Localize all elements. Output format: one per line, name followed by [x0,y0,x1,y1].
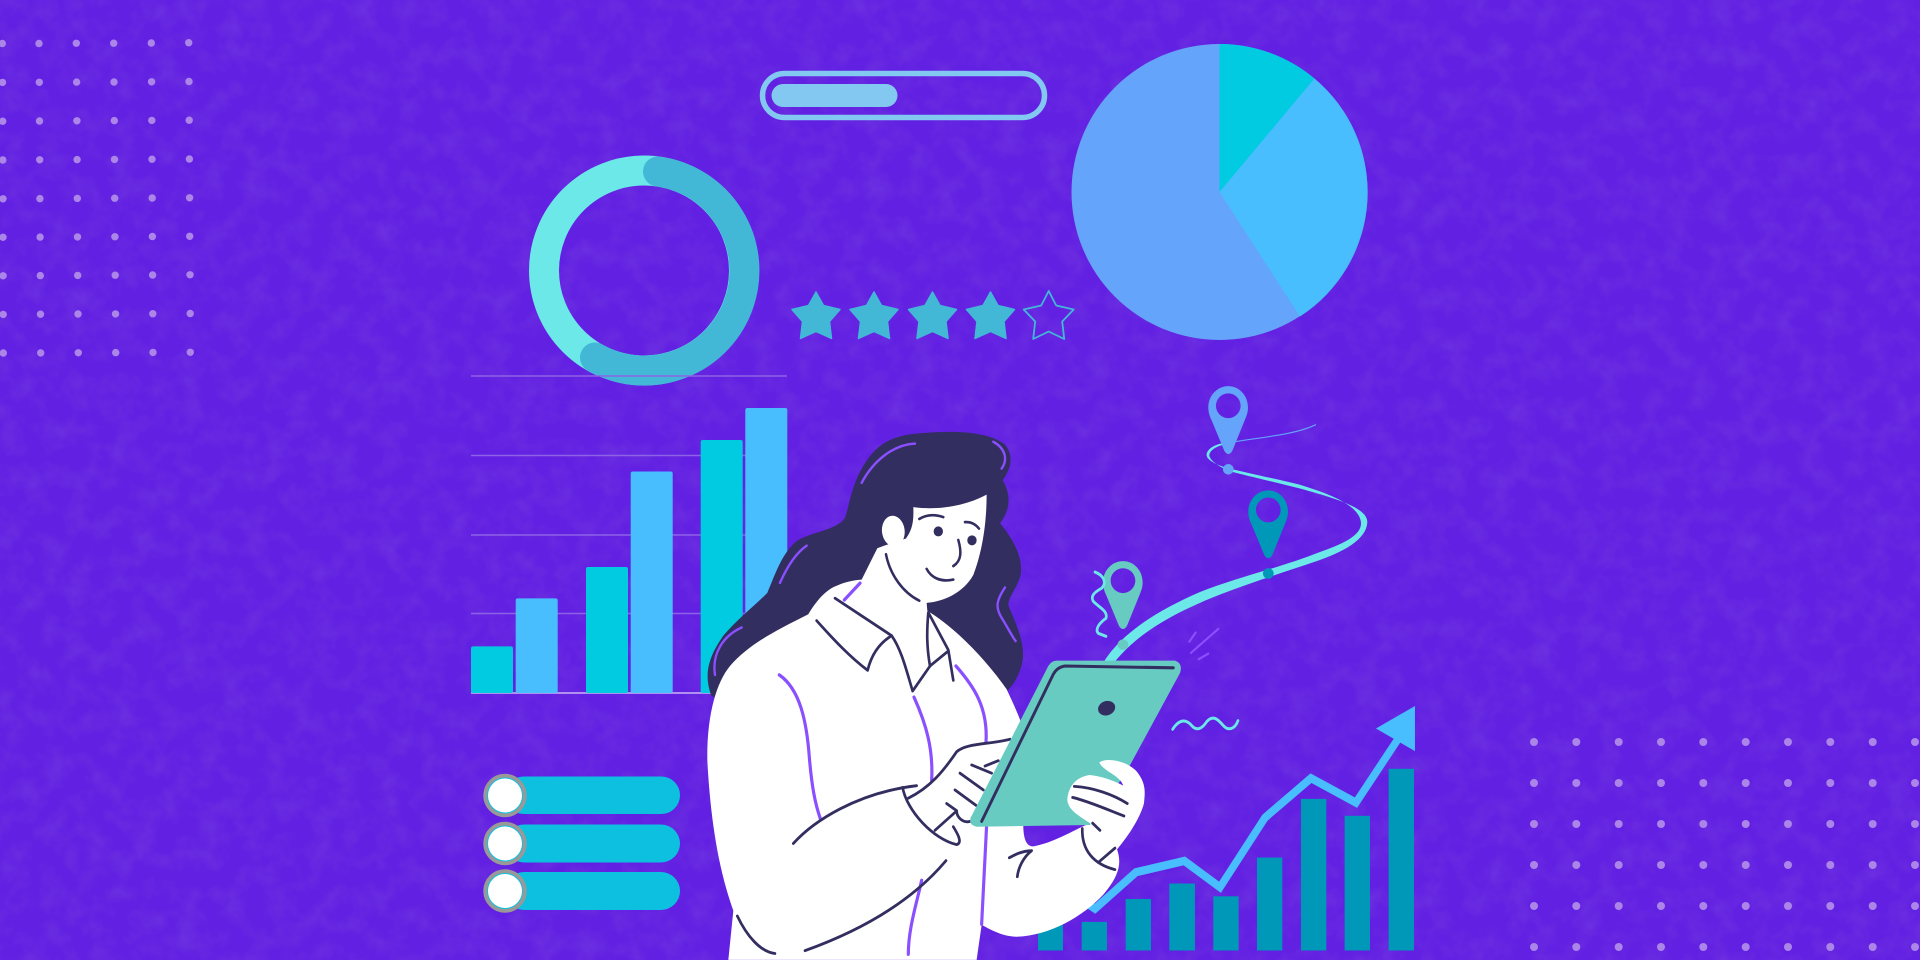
face details [886,515,979,601]
growth bars [1038,769,1414,950]
star rating [792,291,1074,339]
route line [1104,443,1367,662]
ear [880,514,907,548]
hair highlights [714,442,1016,675]
star 2 [850,292,898,338]
bar chart [471,376,787,693]
shirt seams [779,583,987,954]
dot grid: top left [0,39,194,357]
star 4 [966,292,1014,338]
woman with tablet [707,432,1181,960]
toggle 3 [485,871,680,911]
donut chart [544,170,744,371]
hair [708,432,1023,721]
star 3 [908,292,956,338]
squiggle: vertical [1092,572,1106,636]
pin: green [1103,561,1143,650]
toggle list [485,776,680,911]
pin: blue [1208,386,1248,475]
body and face [707,495,1119,960]
pin: teal [1248,490,1288,579]
growth arrow [1086,706,1415,909]
toggle 1 [485,776,680,815]
tablet [970,661,1181,827]
dot grid: bottom right [1530,738,1919,951]
pie chart [1072,44,1368,340]
route tail [1222,425,1316,444]
star 5 outline [1024,291,1074,339]
accent dashes [1189,629,1218,659]
progress bar [762,74,1044,118]
squiggle: horizontal wave [1173,718,1238,729]
toggle 2 [485,824,680,863]
growth chart [1038,706,1415,950]
collar and shirt lines [737,598,1032,954]
right hand [1067,760,1145,870]
star 1 [792,292,840,338]
location route and pins [1092,386,1367,729]
